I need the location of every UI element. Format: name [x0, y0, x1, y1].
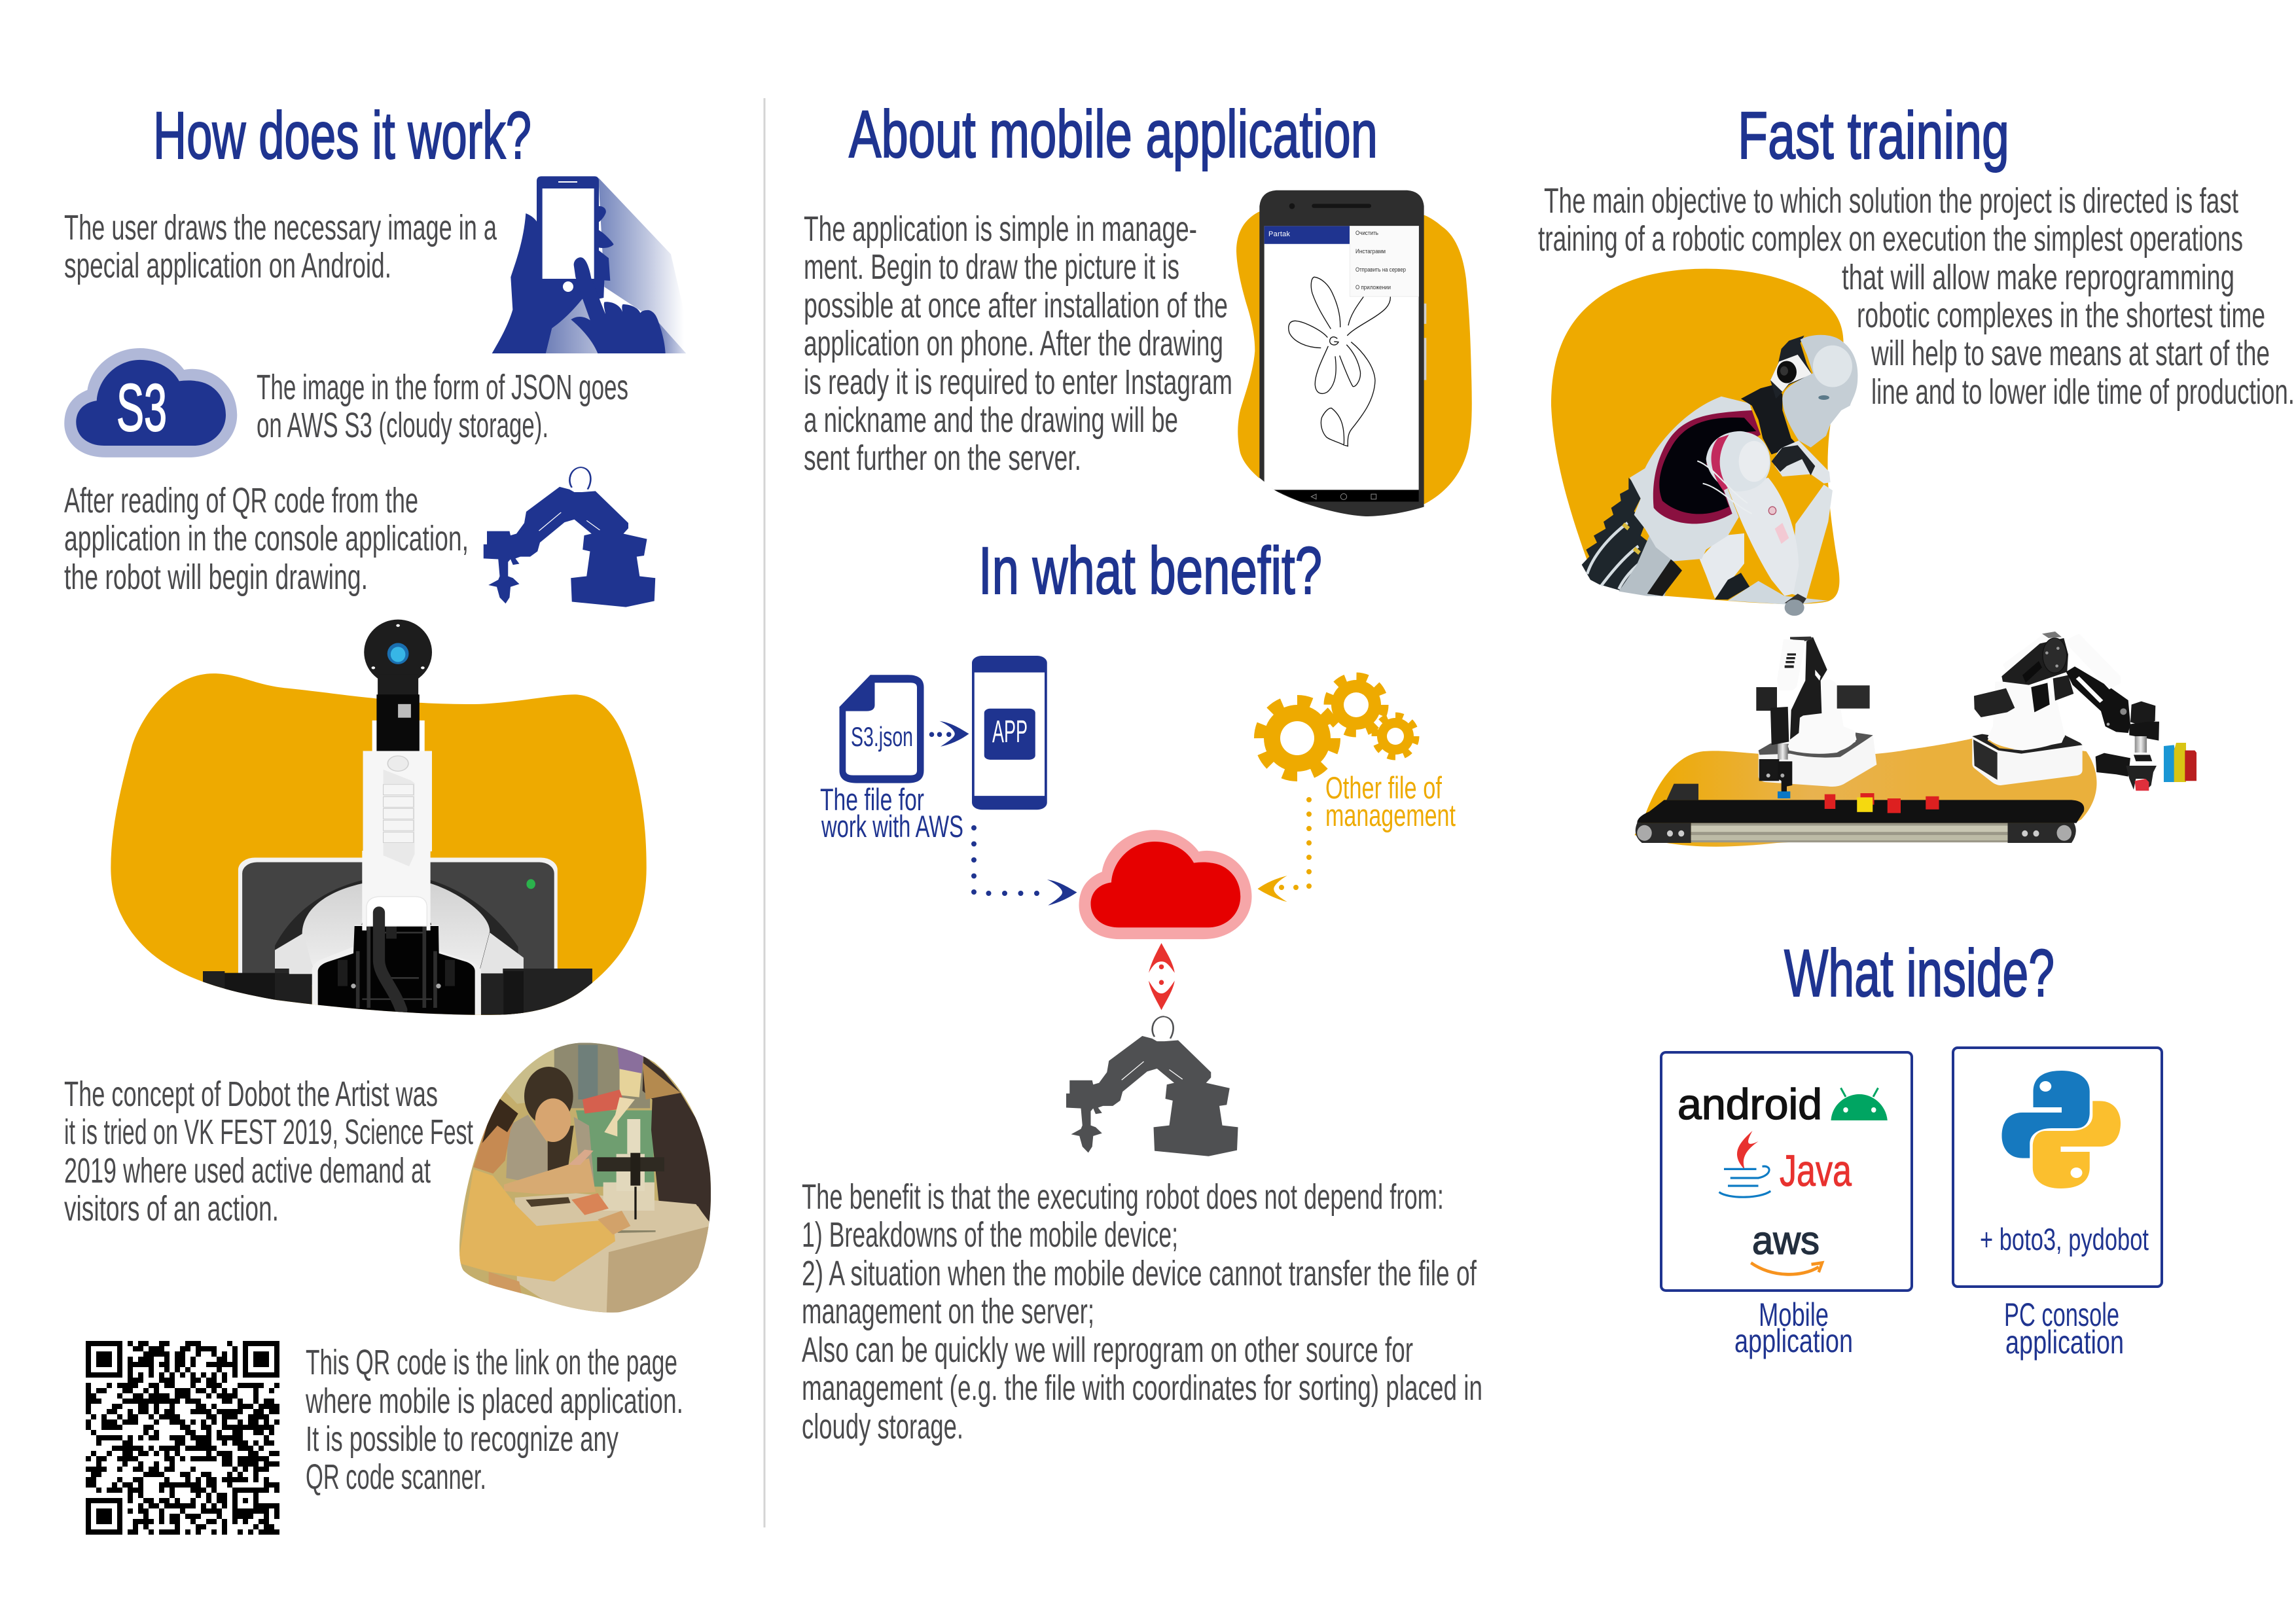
text block: benefit: 1) Breakdowns of the mobile device; [802, 1215, 1178, 1255]
icon: grey robot arm [1066, 1016, 1238, 1156]
arrow: AWS file to cloud [974, 828, 1077, 906]
label: mobile application [1734, 1296, 1853, 1359]
logo: python [2001, 1071, 2121, 1188]
text block: JSON to S3: The image in the form of JSON goes [257, 368, 628, 407]
icon: JSON file: S3.json [851, 721, 913, 752]
column divider [763, 98, 766, 1527]
text block: JSON to S3: on AWS S3 (cloudy storage). [257, 406, 548, 445]
text block: application description: ment. Begin to draw the picture it is [804, 247, 1179, 287]
label: PC console application: PC console [2004, 1296, 2119, 1333]
text block: QR reading: the robot will begin drawing. [64, 558, 368, 597]
conveyor and yellow blob [1635, 738, 2097, 847]
text block: concept [64, 1075, 473, 1228]
text block: JSON to S3 [257, 368, 628, 445]
icon: JSON file [839, 675, 924, 783]
logo: android: android [1677, 1080, 1822, 1128]
text block: benefit: management (e.g. the file with coordinates for sorting) placed in [802, 1368, 1482, 1408]
text block: QR reading: After reading of QR code from the [64, 481, 418, 520]
text block: concept: The concept of Dobot the Artist was [64, 1075, 438, 1114]
panel: fast training [1538, 98, 2295, 847]
text block: application description: sent further on the server. [804, 438, 1081, 478]
text block: benefit: management on the server; [802, 1292, 1094, 1331]
text block: QR description: This QR code is the link on the page [306, 1343, 677, 1382]
text block: application description: is ready it is required to enter Instagram [804, 363, 1232, 402]
illustration: phone with drawing app [1236, 190, 1472, 516]
text block: benefit [802, 1177, 1482, 1446]
logo: java [1719, 1131, 1852, 1197]
logo: aws: aws [1752, 1219, 1820, 1262]
text block: user draws: special application on Android. [64, 246, 391, 285]
icon: app phone [972, 656, 1047, 810]
text block: QR reading [64, 481, 469, 597]
left robot [1756, 637, 1876, 798]
label: file for AWS: The file for [820, 782, 924, 817]
label: PC console application [2004, 1296, 2124, 1361]
text block: benefit: Also can be quickly we will reprogram on other source for [802, 1330, 1413, 1370]
phone screen labels: О приложении [1355, 284, 1391, 291]
logo: java: Java [1780, 1146, 1852, 1196]
label: PC console application: application [2005, 1324, 2124, 1361]
text block: concept: visitors of an action. [64, 1189, 279, 1228]
heading: about mobile application: About mobile application [849, 97, 1378, 171]
panel: what inside [1661, 936, 2162, 1361]
card: mobile application stack [1661, 1052, 1912, 1291]
text block: objective [1538, 181, 2295, 412]
panel: dobot front view on yellow blob [111, 620, 647, 1016]
text block: concept: 2019 where used active demand at [64, 1151, 431, 1190]
right robot with gripper and cubes [1972, 632, 2197, 791]
heading: fast training: Fast training [1738, 98, 2009, 173]
text block: concept: it is tried on VK FEST 2019, Science Fest [64, 1113, 473, 1152]
label: other file of management: management [1325, 798, 1456, 832]
label: boto3, pydobot: + boto3, pydobot [1980, 1222, 2149, 1257]
text block: benefit: cloudy storage. [802, 1407, 963, 1446]
text block: user draws: The user draws the necessary image in a [64, 208, 497, 247]
phone screen labels: Отправить на сервер [1355, 266, 1406, 273]
icon: red cloud [1079, 830, 1251, 939]
arrow: other file to cloud [1258, 800, 1309, 902]
label: mobile application: application [1734, 1323, 1853, 1359]
text block: QR description: QR code scanner. [306, 1457, 486, 1497]
heading: what inside: What inside? [1784, 936, 2054, 1010]
label: other file of management [1325, 770, 1456, 832]
text block: QR reading: application in the console application, [64, 519, 469, 558]
label: mobile application: Mobile [1759, 1296, 1829, 1333]
text block: application description: possible at once after installation of the [804, 286, 1228, 325]
icon: gears [1259, 677, 1416, 776]
panel: how does it work [64, 98, 686, 607]
text block: user draws [64, 208, 497, 285]
phone screen labels: Инстаграмм [1355, 248, 1386, 255]
heading: how does it work: How does it work? [153, 98, 531, 173]
icon: S3 cloud [64, 348, 237, 457]
icon: app phone: APP [992, 715, 1028, 749]
arrow: cloud and robot exchange [1149, 943, 1175, 1010]
label: other file of management: Other file of [1325, 770, 1443, 805]
yellow blob [111, 673, 647, 1015]
illustration: robots with conveyor [1635, 632, 2197, 847]
panel: in what benefit [802, 533, 1482, 1446]
phone screen labels: Partak [1268, 230, 1291, 238]
robot arm front view [203, 620, 592, 1016]
photo: visitors at the festival [458, 1041, 713, 1315]
text block: benefit: The benefit is that the executing robot does not depend from: [802, 1177, 1444, 1217]
text block: application description: The application is simple in manage- [804, 209, 1197, 249]
panel: about mobile application [804, 97, 1472, 516]
card: PC console stack [1953, 1048, 2162, 1287]
text block: application description [804, 209, 1232, 478]
arrow: file to app [929, 721, 969, 747]
text block: QR description: where mobile is placed application. [305, 1382, 683, 1421]
text block: application description: a nickname and the drawing will be [804, 401, 1178, 440]
illustration: thinking robot on yellow blob [1551, 269, 1857, 616]
label: file for AWS: work with AWS [821, 809, 963, 844]
text block: QR description: It is possible to recognize any [306, 1419, 619, 1459]
icon: S3 cloud: S3 [117, 370, 167, 445]
label: file for AWS [820, 782, 963, 844]
text block: benefit: 2) A situation when the mobile device cannot transfer the file of [802, 1254, 1477, 1293]
text block: QR description [305, 1343, 683, 1497]
text block: application description: application on phone. After the drawing [804, 324, 1223, 363]
icon: blue robot arm [484, 467, 655, 607]
phone screen labels [1268, 230, 1406, 291]
logo: android [1677, 1080, 1888, 1128]
QR code [86, 1344, 279, 1532]
phone screen labels: Очистить [1355, 230, 1378, 236]
icon: hands holding phone [492, 176, 686, 353]
heading: in what benefit: In what benefit? [978, 533, 1322, 608]
